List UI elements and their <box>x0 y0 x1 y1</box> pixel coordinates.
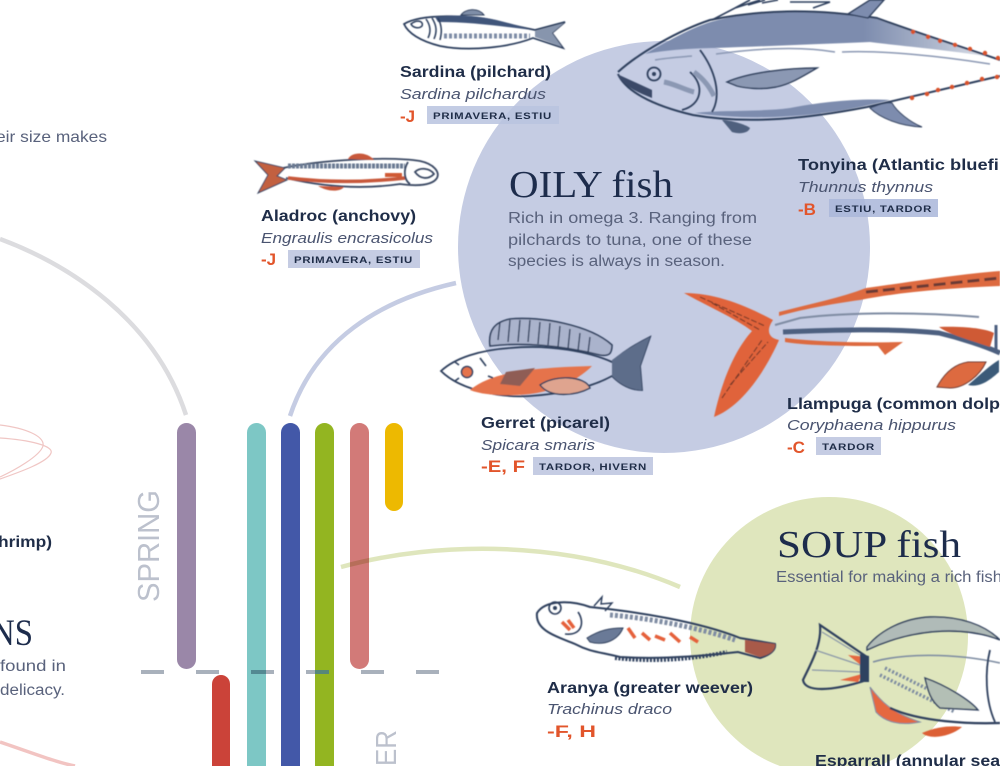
season dividers <box>141 670 439 674</box>
fish: anchovy <box>255 153 438 193</box>
species label: tonyina: ESTIU, TARDOR <box>835 204 932 215</box>
species label: aladroc: -J <box>261 250 276 269</box>
species label: llampuga <box>787 396 1000 457</box>
species label: sardina <box>400 64 559 126</box>
connector arc: grey to spring bar <box>0 239 186 415</box>
species label: aladroc: Engraulis encrasicolus <box>261 230 434 247</box>
fish: greater weever <box>537 597 775 660</box>
fish: dolphinfish <box>684 271 1000 417</box>
text block: prawns description: found in <box>0 658 66 675</box>
bar: green <box>315 423 334 766</box>
species label: llampuga: Llampuga (common dolp <box>787 396 1000 413</box>
species label: aranya: Aranya (greater weever) <box>547 680 753 697</box>
species label: sardina: PRIMAVERA, ESTIU <box>433 111 552 122</box>
season label: spring: SPRING <box>131 490 166 602</box>
text block: prawns description <box>0 658 66 699</box>
text block: oily description: pilchards to tuna, one of these <box>508 232 752 249</box>
species label: aladroc: PRIMAVERA, ESTIU <box>294 255 413 266</box>
species label: sardina: Sardina (pilchard) <box>400 64 551 81</box>
bar: pink <box>350 423 369 669</box>
species label: llampuga: TARDOR <box>822 442 875 453</box>
text block: oily description: Rich in omega 3. Ranging from <box>508 210 757 227</box>
species label: gerret: Spicara smaris <box>481 437 596 454</box>
divider overlays on teal and green bars <box>251 670 329 674</box>
season label: summer: ER <box>371 730 403 766</box>
species label: tonyina <box>798 157 1000 219</box>
fish: picarel <box>441 318 650 396</box>
species label: aranya: Trachinus draco <box>547 701 672 718</box>
text block: oily description: species is always in season. <box>508 253 725 270</box>
bar: yellow <box>385 423 403 511</box>
species label: tonyina: -B <box>798 200 816 219</box>
species label: llampuga: Coryphaena hippurus <box>787 417 957 434</box>
species label: sardina: -J <box>400 107 415 126</box>
heading: oily fish: OILY fish <box>509 164 673 206</box>
species label: gerret: -E, F <box>481 457 525 476</box>
species label: aranya <box>547 680 753 741</box>
panel: soup fish circle <box>690 497 968 766</box>
bar: blue <box>281 423 300 766</box>
bar: teal <box>247 423 266 766</box>
species label: sardina: Sardina pilchardus <box>400 86 547 103</box>
species label: tonyina: Thunnus thynnus <box>798 179 934 196</box>
heading: soup fish: SOUP fish <box>777 524 961 566</box>
species label: tonyina: Tonyina (Atlantic bluefin <box>798 157 1000 174</box>
species label: aladroc <box>261 208 434 269</box>
fish: annular seabream <box>803 617 1000 737</box>
season bars <box>177 423 403 766</box>
species label: llampuga: -C <box>787 438 805 457</box>
fish: tuna <box>617 0 1000 133</box>
fish: sardine <box>404 10 565 49</box>
connector arc: pink lower left <box>0 742 75 766</box>
text block: prawns description: delicacy. <box>0 682 65 699</box>
species label: aranya: -F, H <box>547 722 596 741</box>
bar: red <box>212 675 230 766</box>
species label: gerret: TARDOR, HIVERN <box>539 462 647 473</box>
icon: faint prawn antennae <box>0 425 51 479</box>
text block: soup description: Essential for making a rich fish <box>776 569 1000 586</box>
species label: gerret <box>481 415 653 476</box>
panel: oily fish circle <box>458 41 870 453</box>
species label: gerret: Gerret (picarel) <box>481 415 610 432</box>
bar: purple <box>177 423 196 669</box>
species label: aladroc: Aladroc (anchovy) <box>261 208 416 225</box>
text block: oily description <box>508 210 757 270</box>
connector arc: blue to oily circle <box>290 283 456 416</box>
connector arc: green to soup circle <box>341 549 680 587</box>
